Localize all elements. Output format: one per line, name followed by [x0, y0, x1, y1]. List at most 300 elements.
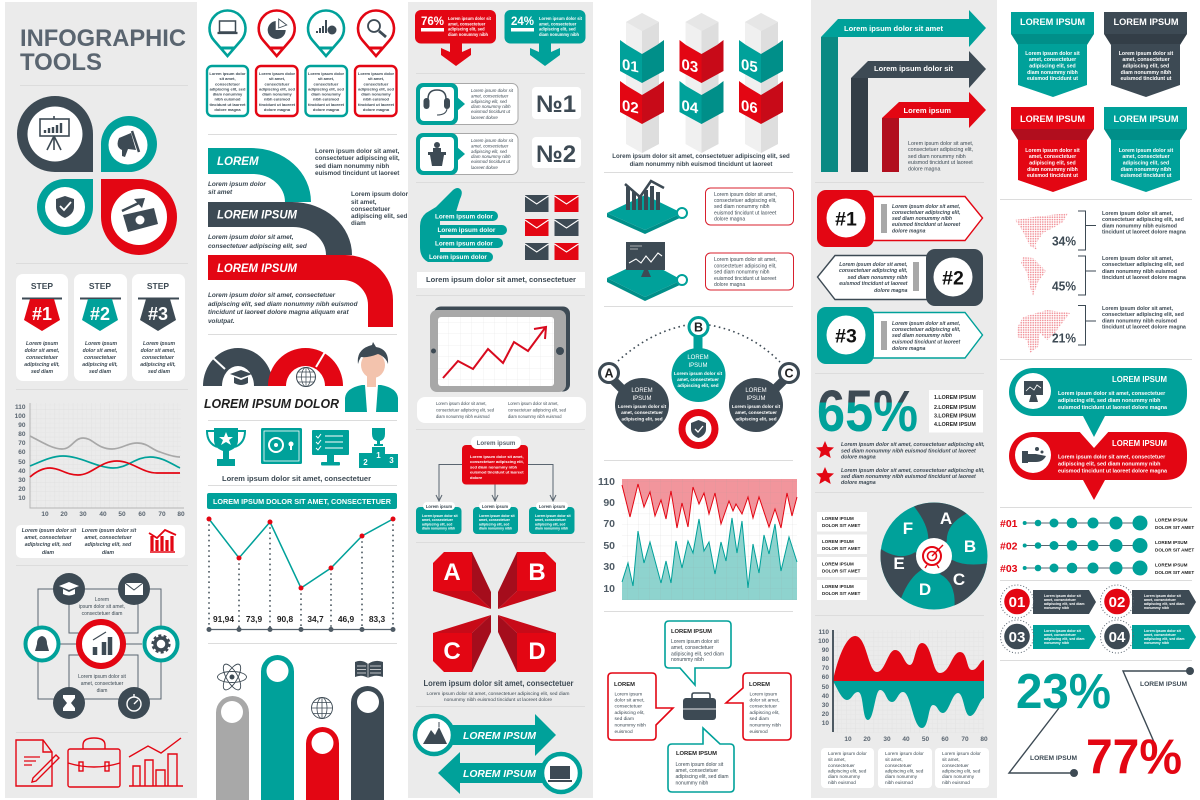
- box: teal left: diam nonummy nibh: [422, 526, 455, 530]
- ribbon: teal 1: diam nonummy nibh: [1027, 70, 1078, 76]
- swirl wheel: C: [953, 570, 965, 589]
- isometric platform: monitor: [607, 242, 687, 301]
- numbered tag 3: [817, 307, 982, 364]
- icon callout: teal: euismod tincidunt ut laoreet dolore magna: [1058, 405, 1168, 411]
- ribbon: dark: [1104, 12, 1187, 97]
- chart caption boxes: Lorem ipsum dolor: [885, 751, 924, 756]
- card: step 2: sed diam: [89, 369, 112, 375]
- card: step 3: adipiscing elit,: [140, 362, 176, 368]
- tag 04: adipiscing elit, sed diam: [1144, 637, 1184, 641]
- tag 02: [1100, 585, 1196, 618]
- card: step 2: consectetuer: [84, 355, 117, 361]
- dotted line chart: 34,7: [307, 614, 324, 624]
- number two card: euismod tincidunt ut: [471, 159, 511, 164]
- line chart: three curves: 100: [15, 413, 26, 420]
- card: step 3: [132, 274, 185, 381]
- red teal mirrored chart: 20: [822, 711, 829, 718]
- box 3: nibh euismod: [313, 96, 340, 102]
- ribbon: red: amet, consectetuer: [1029, 154, 1076, 160]
- number two card: [416, 133, 581, 175]
- circle: dark left: [615, 378, 669, 432]
- box: teal center: amet, consectetuer: [479, 518, 511, 522]
- box: top red: sed diam nonummy nibh: [470, 464, 518, 470]
- icon: gear node: [144, 628, 178, 660]
- dotted line chart: 46,9: [338, 614, 354, 624]
- callout: 24%: [504, 10, 586, 66]
- line chart: three curves: 10: [41, 511, 49, 518]
- chart caption boxes: consectetuer: [885, 763, 912, 768]
- number one card: diam nonummy nibh: [471, 104, 511, 109]
- tag 04: [1100, 620, 1196, 653]
- tablet caption: [417, 397, 586, 423]
- card: step 1: dolor sit amet,: [25, 348, 59, 354]
- bubble: right: dolor sit amet,: [750, 698, 780, 704]
- numbered tag 3: consectetuer adipiscing elit,: [892, 327, 961, 333]
- red teal mirrored chart: 30: [822, 702, 829, 709]
- ribbon: teal 1: [1011, 12, 1094, 97]
- icon: podium: 2: [363, 458, 368, 467]
- box 3: [306, 66, 347, 116]
- box 2: [256, 66, 298, 116]
- icon: mail node: [118, 573, 150, 605]
- tablet caption: Lorem ipsum dolor sit amet,: [508, 401, 559, 406]
- chart caption boxes: diam nonummy: [885, 774, 918, 779]
- curved ribbons: Lorem ipsum dolor: [351, 191, 409, 198]
- box 2: consectetuer: [265, 82, 290, 86]
- step cards: [16, 274, 185, 381]
- arrow: right with mountain: [415, 714, 556, 756]
- icon: red bars: [149, 530, 176, 552]
- icon: briefcase: [68, 738, 120, 787]
- number two card: diam nonummy nibh: [471, 154, 511, 159]
- ribbon: teal 2: diam nonummy nibh: [1121, 167, 1171, 173]
- dense area chart: 50: [603, 540, 615, 552]
- box 4: sit amet,: [368, 76, 384, 81]
- ribbon: dark: Lorem ipsum dolor sit: [1119, 51, 1174, 57]
- dense area chart: 10: [603, 583, 615, 595]
- icon: center chart node: [79, 622, 123, 666]
- icon: headset: [424, 90, 450, 115]
- chart caption boxes: sit amet,: [828, 757, 846, 762]
- icon: stopwatch node: [118, 687, 150, 719]
- row 03: [1000, 560, 1194, 576]
- tag 02: nonummy nibh: [1144, 606, 1169, 610]
- box 3: tincidunt ut laoreet: [308, 102, 345, 107]
- row 03: LOREM IPSUM: [1155, 562, 1188, 568]
- envelope grid: [525, 195, 578, 260]
- faceted ABCD: B: [528, 559, 546, 586]
- numbered tag 2: euismod tincidunt ut laoreet: [839, 281, 908, 287]
- map: south america: tincidunt ut laoreet dolore magna: [1102, 275, 1186, 281]
- card: step 3: STEP: [147, 281, 169, 291]
- callout: 24%: 24%: [511, 14, 534, 28]
- icon callout: teal: Lorem ipsum dolor sit amet, consectetuer: [1058, 391, 1166, 397]
- caption box with red bar icon: diam: [42, 550, 54, 556]
- line chart: three curves: 110: [15, 404, 26, 411]
- curved ribbons: Lorem ipsum dolor sit amet,: [208, 234, 294, 241]
- card: step 1: STEP: [31, 281, 53, 291]
- teal heading bar: [207, 493, 397, 509]
- arrow: left with laptop: LOREM IPSUM: [463, 768, 536, 780]
- box 4: dolore magna: [363, 107, 390, 112]
- dotted line chart: 83,3: [369, 614, 385, 624]
- tablet caption: diam nonummy nibh euismod: [508, 414, 562, 419]
- hub diagram: amet, consectetuer: [81, 681, 124, 687]
- ribbon: red: Lorem ipsum dolor sit: [1025, 148, 1080, 154]
- pillars caption: diam nonummy nibh euismod tincidunt ut laoreet: [630, 161, 772, 168]
- box: teal right: amet, consectetuer: [535, 518, 567, 522]
- dense area chart: [598, 476, 797, 600]
- ABC diagram: [600, 318, 798, 446]
- percent callouts: [415, 10, 586, 66]
- pill bars: [216, 655, 384, 800]
- dotted line chart: 91,94: [213, 614, 234, 624]
- ribbon: teal 1: Lorem ipsum dolor sit: [1025, 51, 1080, 57]
- bubble: bottom: adipiscing elit, sed diam: [676, 774, 729, 780]
- numbered tag 2: Lorem ipsum dolor sit amet,: [839, 262, 908, 268]
- faceted ABCD: [433, 552, 556, 672]
- icon: star 1: [816, 441, 834, 458]
- bubble: left: Lorem ipsum: [614, 692, 642, 698]
- ribbon: red: [1011, 107, 1094, 192]
- red teal mirrored chart: 20: [863, 736, 871, 743]
- red teal mirrored chart: 30: [883, 736, 891, 743]
- icon: line and bars: [129, 738, 183, 786]
- circle: teal center: [672, 348, 726, 402]
- icon: checklist monitor: [312, 430, 349, 466]
- swirl wheel: [871, 502, 990, 611]
- ribbon banners: [1011, 12, 1187, 192]
- split percent stats: [1009, 665, 1194, 784]
- caption strip: Lorem ipsum dolor sit amet, consectetuer: [426, 275, 576, 284]
- row 01: #01: [1000, 518, 1018, 530]
- tag 04: nonummy nibh: [1144, 641, 1169, 645]
- box 2: tincidunt ut laoreet: [259, 102, 296, 107]
- card: step 2: [74, 274, 127, 381]
- split percent stats: LOREM IPSUM: [1140, 681, 1187, 688]
- chart caption boxes: nibh euismod: [885, 780, 913, 785]
- ABCD caption: Lorem ipsum dolor sit amet, consectetuer: [424, 679, 574, 688]
- row 02: #02: [1000, 540, 1018, 552]
- box 1: consectetuer: [215, 82, 240, 86]
- box 1: tincidunt ut laoreet: [210, 102, 246, 107]
- circle: dark left: amet, consectetuer: [621, 410, 663, 415]
- callout: 24%: adipiscing elit, sed: [539, 26, 576, 32]
- box 3: sit amet,: [318, 76, 334, 81]
- card: step 3: dolor sit amet,: [141, 348, 175, 354]
- arrow note: Lorem ipsum dolor sit amet,: [908, 141, 973, 147]
- pin: signal chart: [308, 10, 344, 56]
- number one card: laoreet dolore: [471, 115, 498, 120]
- box 1: dolore magna: [214, 107, 241, 112]
- row 02: DOLOR SIT AMET: [1155, 548, 1194, 552]
- card: step 2: Lorem ipsum: [85, 341, 117, 347]
- line chart: three curves: 70: [158, 511, 166, 518]
- org chart: [416, 436, 574, 534]
- star notes: sed diam nonummy nibh euismod tincidunt ut laoreet: [841, 448, 976, 454]
- map: eurasia africa: Lorem ipsum dolor sit amet,: [1102, 306, 1173, 312]
- red teal mirrored chart: 50: [922, 736, 929, 743]
- curved ribbons: consectetuer: [351, 206, 391, 213]
- bubble: right: nonummy nibh: [750, 722, 781, 728]
- bubble: top: LOREM IPSUM: [671, 629, 712, 635]
- ribbon: teal 1: amet, consectetuer: [1029, 57, 1076, 63]
- ribbon: teal 2: amet, consectetuer: [1122, 154, 1170, 160]
- box: teal right: Lorem ipsum dolor sit: [535, 514, 571, 518]
- caption box with red bar icon: adipiscing elit, sed: [85, 542, 132, 548]
- tag 02: amet, consectetuer: [1144, 598, 1177, 602]
- card: step 2: dolor sit amet,: [83, 348, 117, 354]
- red teal mirrored chart: 80: [822, 656, 829, 663]
- line chart: three curves: 50: [118, 511, 126, 518]
- curved ribbons: [208, 148, 409, 327]
- number one card: №1: [536, 91, 576, 118]
- tag 03: Lorem ipsum dolor sit: [1044, 629, 1082, 633]
- wheel legend boxes: DOLOR SIT AMET: [822, 546, 861, 551]
- number two card: №2: [536, 141, 576, 168]
- caption box with red bar icon: diam: [102, 550, 114, 556]
- red note 2: euismod tincidunt ut laoreet: [714, 276, 777, 282]
- pin text boxes: [207, 66, 396, 116]
- title: INFOGRAPHIC: [20, 25, 186, 52]
- tablet caption: consectetuer adipiscing elit, sed: [436, 408, 495, 412]
- bubble: left: adipiscing elit,: [614, 710, 645, 716]
- callout: 24%: Lorem ipsum dolor sit: [539, 16, 583, 21]
- dense area chart: 90: [603, 497, 615, 509]
- box: teal left: Lorem ipsum dolor sit: [422, 514, 458, 518]
- map: north america: consectetuer adipiscing elit, sed: [1102, 217, 1184, 223]
- icon callout: red: [1009, 430, 1187, 500]
- circle: dark right: adipiscing elit, sed: [735, 416, 777, 422]
- red note 1: Lorem ipsum dolor sit amet,: [714, 192, 777, 198]
- pin: laptop: [210, 10, 246, 56]
- curved ribbons: tincidunt ut laoreet dolore magna aliquam erat: [208, 309, 349, 316]
- card: step 1: Lorem ipsum: [26, 341, 58, 347]
- circle: teal center: amet, consectetuer: [677, 377, 719, 382]
- map: north america: 34%: [1052, 234, 1076, 248]
- caption box with red bar icon: amet, consectetuer: [24, 535, 73, 541]
- card: step 1: sed diam: [31, 369, 54, 375]
- hub diagram: Lorem ipsum dolor sit: [78, 674, 127, 680]
- red outline icons: [16, 738, 183, 787]
- bubble: left: euismod: [614, 729, 633, 735]
- callout: 76%: adipiscing elit, sed: [448, 26, 485, 32]
- bubble: bottom: [668, 728, 734, 792]
- star notes: Lorem ipsum dolor sit amet, consectetuer adipiscing elit,: [841, 442, 985, 448]
- icon: presentation petal: [17, 96, 93, 172]
- ribbon: teal 1: euismod tincidunt ut: [1027, 76, 1078, 82]
- chart caption boxes: sit amet,: [885, 757, 903, 762]
- arrow: teal: [821, 10, 986, 172]
- box: top red: Lorem ipsum dolor sit amet,: [470, 454, 524, 459]
- node A: [600, 364, 618, 382]
- number two card: laoreet dolore: [471, 165, 498, 170]
- red note 1: [706, 188, 794, 225]
- box 4: tincidunt ut laoreet: [358, 102, 395, 107]
- curved ribbons: volutpat.: [208, 318, 235, 325]
- swirl wheel: D: [919, 580, 931, 599]
- chart caption boxes: nibh euismod: [942, 780, 970, 785]
- half rings with person: [203, 342, 398, 412]
- ribbon: dark: diam nonummy nibh: [1121, 70, 1171, 76]
- star notes: sed diam nonummy nibh euismod tincidunt ut laoreet: [841, 474, 976, 480]
- half ring: dark: [203, 348, 273, 386]
- row 02: LOREM IPSUM: [1155, 540, 1188, 545]
- swirl wheel: B: [964, 537, 976, 556]
- half ring: red: [268, 348, 343, 386]
- bubble: right: LOREM: [749, 682, 770, 688]
- red teal mirrored chart: 50: [822, 684, 829, 691]
- map: south america: [1021, 256, 1186, 296]
- line chart: three curves: 60: [138, 511, 146, 518]
- box: teal center: adipiscing elit, sed: [479, 522, 509, 526]
- card: step 3: sed diam: [148, 369, 171, 375]
- dense area chart: 110: [598, 476, 615, 488]
- curved ribbons: LOREM IPSUM: [217, 263, 297, 275]
- tag 04: Lorem ipsum dolor sit: [1144, 629, 1182, 633]
- curved ribbons: Lorem ipsum dolor sit amet, consectetuer: [208, 292, 336, 299]
- circle: dark right: IPSUM: [746, 396, 766, 402]
- numbered tag 2: sed diam nonummy nibh: [848, 275, 908, 281]
- hub diagram: Lorem: [95, 597, 109, 603]
- icon: trophy: [207, 428, 245, 466]
- box: teal center: Lorem ipsum: [482, 504, 508, 509]
- stat: 23%: 23%: [1016, 665, 1111, 719]
- tag 01: 01: [1009, 594, 1025, 611]
- red teal mirrored chart: 70: [961, 736, 969, 743]
- box 2: sit amet,: [269, 76, 285, 81]
- card: step 3: consectetuer: [142, 355, 175, 361]
- bubble: top: Lorem ipsum dolor sit: [671, 639, 719, 645]
- list box: 4.LOREM IPSUM: [934, 422, 976, 428]
- pillar 03 04: 03: [682, 56, 698, 76]
- box 1: adipiscing elit, sed: [210, 86, 246, 92]
- box: teal center: [473, 502, 518, 534]
- red note 2: dolore magna: [714, 282, 745, 288]
- bubble: top: [665, 621, 731, 685]
- numbered tag 2: consectetuer adipiscing elit,: [839, 268, 908, 274]
- card: step 1: [16, 274, 68, 381]
- callout: 76%: 76%: [421, 14, 444, 28]
- star notes: dolore magna: [841, 480, 876, 486]
- faceted ABCD: A: [443, 559, 461, 586]
- bubble: right: sed diam: [750, 716, 769, 722]
- box: teal right: adipiscing elit, sed: [535, 522, 565, 526]
- box 1: sit amet,: [219, 76, 236, 81]
- tag 01: amet, consectetuer: [1044, 598, 1077, 602]
- tag 03: [1000, 620, 1096, 653]
- map: eurasia africa: 21%: [1052, 330, 1076, 346]
- curved ribbons: Lorem ipsum dolor sit amet,: [315, 148, 400, 155]
- star notes: [841, 442, 985, 486]
- box: teal center: Lorem ipsum dolor sit: [479, 514, 515, 518]
- icon callout: teal: [1009, 368, 1187, 437]
- arrow note: dolore magna: [908, 166, 940, 172]
- bubble: bottom: amet, consectetuer: [676, 768, 718, 774]
- map: south america: 45%: [1052, 278, 1076, 294]
- box 4: [355, 66, 396, 116]
- faceted ABCD: D: [528, 638, 546, 665]
- curved ribbons: euismod tincidunt ut laoreet: [315, 170, 400, 177]
- icon: shield petal: [37, 179, 93, 235]
- icon: target: [923, 545, 943, 568]
- red teal mirrored chart: 70: [822, 665, 829, 672]
- bubble: right: consectetuer: [750, 704, 777, 710]
- curved ribbons: Lorem ipsum dolor: [208, 181, 266, 188]
- map: north america: [1015, 211, 1186, 250]
- bubble: bottom: LOREM IPSUM: [676, 751, 717, 757]
- star notes: Lorem ipsum dolor sit amet, consectetuer adipiscing elit,: [841, 468, 985, 474]
- line chart: three curves: 40: [18, 468, 26, 475]
- pillar 03 04: 04: [682, 97, 699, 118]
- person: [345, 342, 398, 412]
- red note 1: consectetuer adipiscing elit,: [714, 198, 777, 204]
- box 2: dolore magna: [264, 107, 291, 112]
- bar: dark book: [351, 661, 384, 800]
- isometric platform: chart: [607, 181, 687, 234]
- chart caption boxes: Lorem ipsum dolor: [942, 751, 981, 756]
- numbered tag 3: sed diam nonummy nibh: [892, 333, 952, 339]
- red note 2: Lorem ipsum dolor sit amet,: [714, 257, 777, 263]
- ribbon: teal 2: euismod tincidunt ut: [1120, 173, 1172, 179]
- line chart: three curves: 30: [18, 477, 26, 484]
- curved ribbons: sit amet: [208, 189, 233, 196]
- chart caption boxes: Lorem ipsum dolor: [828, 751, 867, 756]
- card: step 2: #2: [90, 304, 110, 324]
- bubble: bottom: Lorem ipsum dolor sit: [676, 762, 724, 768]
- tag 03: adipiscing elit, sed diam: [1044, 637, 1084, 641]
- numbered tag 1: euismod tincidunt ut laoreet: [892, 222, 961, 228]
- swirl wheel: A: [940, 509, 952, 528]
- box 4: diam nonummy: [361, 92, 392, 96]
- ABCD caption: nonummy nibh euismod tincidunt ut laoreet dolore: [444, 697, 552, 703]
- curved ribbons: consectetuer adipiscing elit, sed: [208, 243, 308, 250]
- caption box with red bar icon: Lorem ipsum dolor sit: [22, 528, 77, 534]
- ABCD caption: [424, 679, 574, 703]
- number two card: Lorem ipsum dolor sit: [471, 138, 514, 143]
- circle: teal center: Lorem ipsum dolor sit: [674, 371, 723, 376]
- bubble: left: dolor sit amet,: [614, 698, 645, 704]
- red teal mirrored chart: 40: [902, 736, 910, 743]
- box 2: nibh euismod: [264, 96, 291, 102]
- circle: teal center: IPSUM: [688, 363, 708, 369]
- row 03: DOLOR SIT AMET: [1155, 570, 1194, 575]
- split percent stats: LOREM IPSUM: [1030, 755, 1077, 762]
- icon: safe: [261, 428, 302, 464]
- swirl wheel: F: [903, 519, 913, 538]
- row 01: LOREM IPSUM: [1155, 518, 1188, 522]
- bubble: right: euismod: [750, 729, 768, 735]
- pillar 01 02: [620, 13, 664, 153]
- ribbon: dark: euismod tincidunt ut: [1120, 76, 1172, 82]
- circle: dark right: LOREM: [745, 388, 767, 394]
- icon callout: red: euismod tincidunt ut laoreet dolore magna: [1058, 468, 1168, 474]
- box 2: adipiscing elit, sed: [259, 86, 295, 92]
- hand with fingers: Lorem ipsum dolor: [435, 240, 493, 248]
- red teal mirrored chart: 90: [822, 647, 829, 654]
- number one card: amet, consectetuer: [471, 94, 509, 98]
- twin arrows: [415, 714, 580, 794]
- box: teal center: diam nonummy nibh: [479, 526, 512, 530]
- chart caption boxes: adipiscing elit, sed: [828, 768, 867, 774]
- tag 01: adipiscing elit, sed diam: [1044, 602, 1084, 606]
- red teal mirrored chart: 110: [818, 629, 829, 636]
- map: north america: diam nonummy nibh euismod: [1102, 224, 1177, 230]
- icon callout: red: adipiscing elit, sed diam nonummy nibh: [1058, 462, 1160, 468]
- arrow: dark: [851, 51, 986, 172]
- tag 04: amet, consectetuer: [1144, 633, 1177, 637]
- bubble: right: Lorem ipsum: [750, 692, 777, 698]
